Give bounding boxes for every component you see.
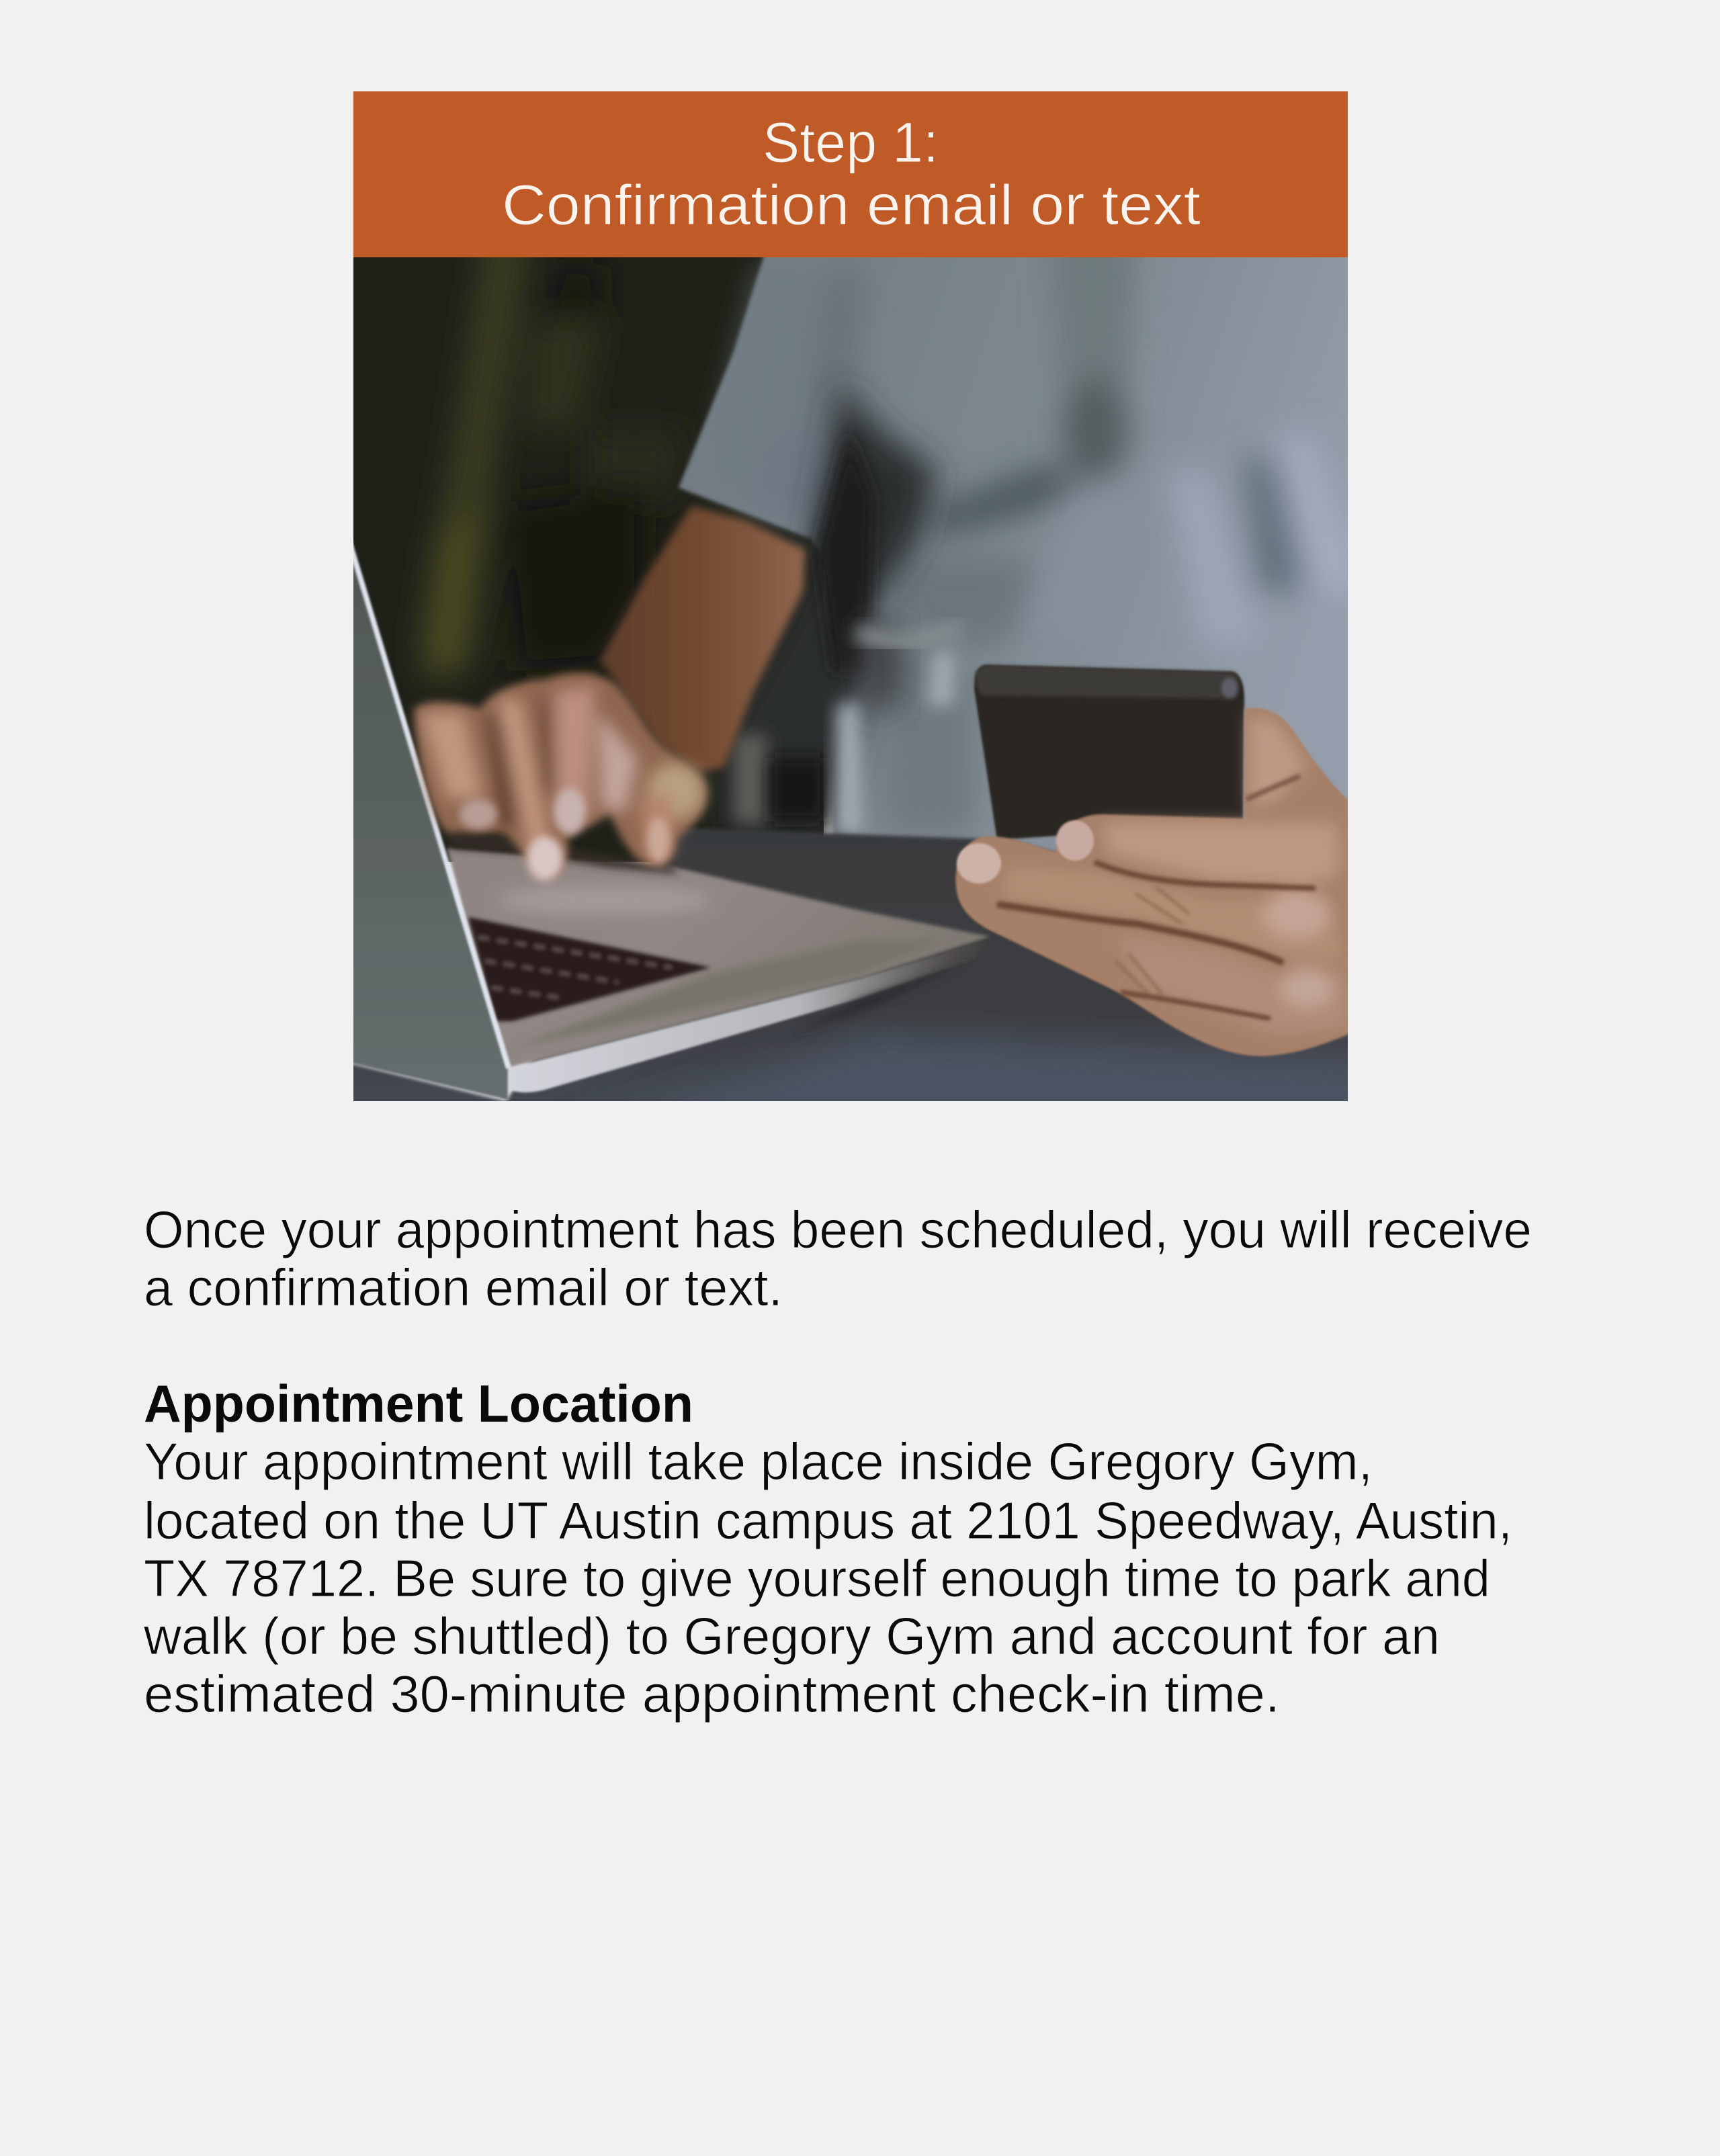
intro paragraph — [144, 1200, 1532, 1317]
location paragraph: estimated 30-minute appointment check-in time. — [144, 1664, 1280, 1723]
forearm — [600, 506, 806, 773]
phone — [974, 665, 1244, 840]
location paragraph: Your appointment will take place inside Gregory Gym, — [144, 1432, 1373, 1491]
header banner — [353, 91, 1348, 257]
laptop — [336, 497, 990, 1100]
body text — [143, 1200, 1532, 1723]
keyboard — [468, 917, 711, 1021]
shirt folds — [712, 228, 1364, 645]
intro paragraph: a confirmation email or text. — [144, 1258, 783, 1317]
heading: appointment location: Appointment Location — [144, 1374, 693, 1433]
laptop lid — [353, 561, 509, 1101]
right hand holding phone — [955, 708, 1364, 1056]
shirt — [677, 257, 1348, 853]
header banner: Step 1: — [763, 111, 939, 174]
location paragraph — [143, 1432, 1512, 1723]
photo: person using laptop and phone — [353, 257, 1348, 1101]
location paragraph: located on the UT Austin campus at 2101 Speedway, Austin, — [144, 1491, 1512, 1550]
location paragraph: walk (or be shuttled) to Gregory Gym and account for an — [143, 1606, 1440, 1666]
plant background — [353, 228, 824, 862]
silver front edge — [509, 939, 990, 1092]
left hand on trackpad — [415, 673, 706, 881]
intro paragraph: Once your appointment has been scheduled, you will receive — [144, 1200, 1532, 1259]
table — [353, 827, 1348, 1101]
dark gap between arm and shirt — [719, 383, 974, 840]
header banner: Confirmation email or text — [502, 173, 1201, 236]
laptop deck — [447, 848, 990, 1068]
step panel: header and photo — [353, 91, 1348, 1101]
location paragraph: TX 78712. Be sure to give yourself enough time to park and — [144, 1549, 1490, 1608]
